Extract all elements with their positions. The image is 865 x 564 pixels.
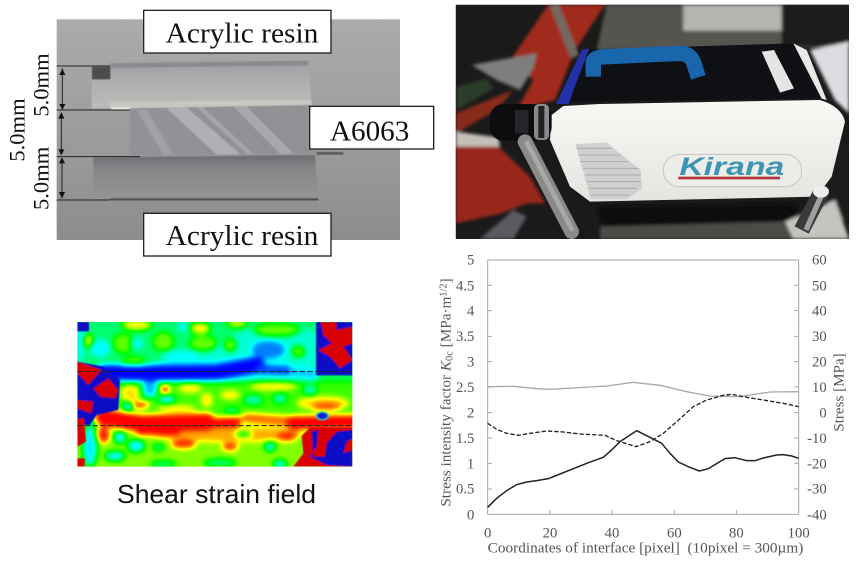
left axis tick labels: 3.5 bbox=[456, 329, 474, 345]
right axis tick labels: -30 bbox=[807, 482, 827, 498]
label: A6063 bbox=[310, 106, 434, 149]
x axis tick labels bbox=[484, 525, 810, 541]
label: bottom acrylic resin: Acrylic resin bbox=[166, 220, 318, 252]
left axis tick labels: 1.5 bbox=[456, 431, 474, 447]
right axis tick labels: 40 bbox=[812, 304, 827, 320]
left axis tick labels: 1 bbox=[467, 456, 474, 472]
panel: Kirana camera photograph bbox=[456, 5, 852, 239]
panel: shear strain field heat map bbox=[77, 322, 352, 467]
right axis tick labels: 0 bbox=[819, 405, 827, 421]
camera handle bbox=[593, 53, 698, 77]
left axis tick labels: 2.5 bbox=[456, 380, 474, 396]
camera top plate bbox=[570, 43, 822, 102]
x axis tick labels: 60 bbox=[667, 525, 682, 541]
dashed interface lines bbox=[77, 372, 352, 426]
dimension label: middle 5.0mm: 5.0mm bbox=[4, 98, 29, 162]
blue shear band bbox=[105, 365, 257, 373]
dimension label: lower 5.0mm: 5.0mm bbox=[29, 146, 54, 210]
red shear band bbox=[103, 417, 207, 423]
upper acrylic resin block bbox=[92, 61, 312, 109]
right axis title: Stress [MPa] bbox=[831, 353, 847, 432]
right axis tick labels: 50 bbox=[812, 278, 827, 294]
left axis tick labels: 4 bbox=[467, 304, 475, 320]
left axis title: [MPa·m bbox=[439, 296, 455, 351]
label: bottom acrylic resin bbox=[144, 213, 331, 256]
label: top acrylic resin bbox=[144, 10, 331, 53]
Kirana logo: Kirana bbox=[679, 154, 784, 181]
camera blue trim bbox=[556, 48, 589, 104]
dashed stress line bbox=[488, 394, 799, 447]
mid band blobs bbox=[121, 382, 350, 412]
left axis tick labels: 2 bbox=[467, 405, 474, 421]
caption: shear strain field: Shear strain field bbox=[117, 479, 316, 509]
aluminium A6063 block bbox=[130, 105, 317, 155]
x axis tick labels: 40 bbox=[605, 525, 619, 541]
left axis tick labels: 5 bbox=[467, 253, 474, 269]
lab background bbox=[456, 5, 852, 239]
left axis tick labels: 0.5 bbox=[456, 482, 474, 498]
gray stress line bbox=[488, 382, 799, 397]
camera label sticker bbox=[762, 50, 794, 93]
left axis title: 1/2 bbox=[439, 283, 450, 297]
left axis tick labels: 4.5 bbox=[456, 278, 474, 294]
solid stress intensity line bbox=[488, 431, 799, 507]
saturated noise patch: top right bbox=[316, 322, 353, 375]
saturated noise patch: left bbox=[77, 322, 120, 467]
support rods bbox=[525, 141, 829, 232]
x axis tick labels: 0 bbox=[484, 525, 491, 541]
right axis tick labels: -20 bbox=[807, 456, 827, 472]
lower acrylic resin block bbox=[93, 155, 318, 200]
label: A6063: A6063 bbox=[330, 115, 409, 147]
x axis title: Coordinates of interface [pixel] (10pixel = 300µm) bbox=[488, 541, 803, 557]
left axis title: 0c bbox=[445, 351, 456, 361]
dimension lines and arrows bbox=[57, 66, 140, 200]
left axis title: Stress intensity factor K bbox=[439, 361, 455, 507]
blue spot in red band bbox=[316, 412, 328, 420]
left axis tick labels: 0 bbox=[467, 507, 474, 523]
x axis tick labels: 20 bbox=[543, 525, 557, 541]
dimension label: upper 5.0mm: 5.0mm bbox=[29, 53, 54, 117]
camera vent grille bbox=[576, 143, 642, 199]
lower band blobs bbox=[150, 426, 303, 442]
plot frame and ticks bbox=[488, 260, 799, 514]
right axis tick labels: 10 bbox=[812, 380, 827, 396]
right axis tick labels: 20 bbox=[812, 355, 827, 371]
x axis tick labels: 80 bbox=[729, 525, 744, 541]
panel: specimen photograph bbox=[4, 10, 434, 256]
left axis tick labels bbox=[456, 253, 475, 523]
camera lens bbox=[490, 104, 552, 141]
x axis tick labels: 100 bbox=[788, 525, 810, 541]
left axis title: ] bbox=[439, 278, 455, 283]
camera body bbox=[550, 100, 845, 202]
left axis tick labels: 3 bbox=[467, 355, 474, 371]
right axis tick labels: 60 bbox=[812, 253, 827, 269]
scalar field blobs bbox=[77, 322, 352, 467]
right axis tick labels: -40 bbox=[807, 507, 827, 523]
label: top acrylic resin: Acrylic resin bbox=[166, 18, 318, 50]
chart: stress intensity factor and stress versus interface coordinate bbox=[439, 253, 847, 557]
right axis tick labels: 30 bbox=[812, 329, 827, 345]
right axis tick labels: -10 bbox=[807, 431, 827, 447]
Kirana logo bbox=[663, 154, 802, 187]
saturated noise patch: bottom right bbox=[293, 427, 353, 467]
right axis tick labels bbox=[807, 253, 827, 523]
